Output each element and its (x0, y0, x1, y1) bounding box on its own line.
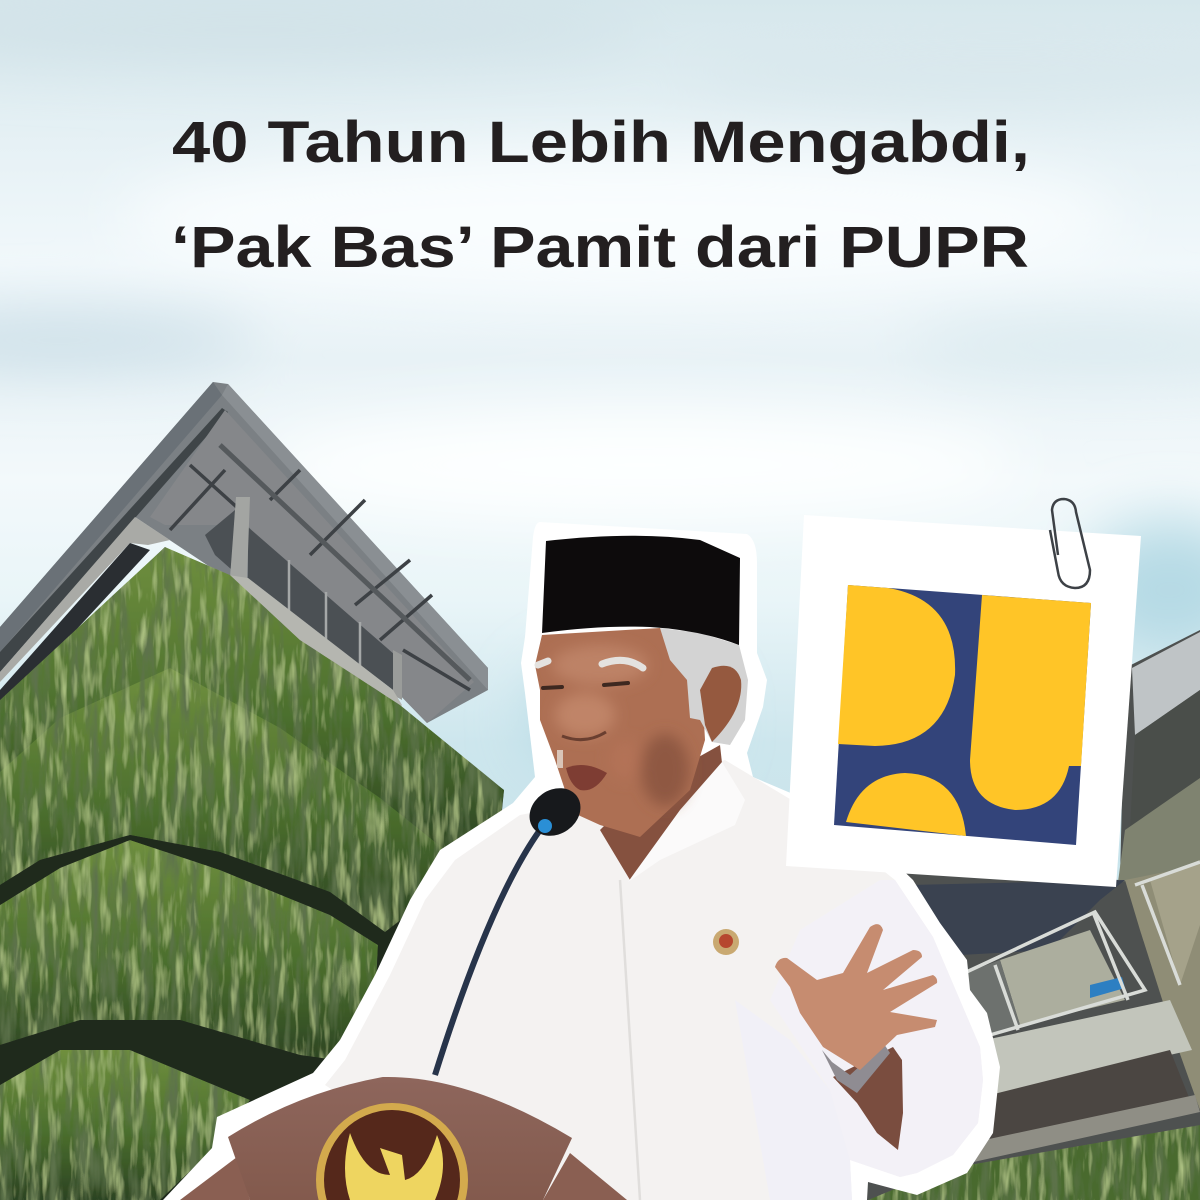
hand (775, 924, 937, 1070)
sticker card with PU logo (786, 499, 1141, 887)
ear (700, 666, 741, 742)
lapel pin (713, 929, 739, 955)
hair (660, 628, 748, 745)
green tier 3 (0, 840, 378, 1065)
sleeve (770, 880, 983, 1177)
title line 2: ‘Pak Bas’ Pamit dari PUPR (171, 215, 1029, 280)
green tier 4 (0, 1050, 250, 1200)
facade shadow base (0, 547, 504, 1200)
emblem (316, 1103, 468, 1200)
black cap (542, 536, 740, 645)
neck (600, 745, 725, 880)
green tier 2 (0, 668, 445, 932)
shirt (325, 760, 983, 1200)
title line 1: 40 Tahun Lebih Mengabdi, (172, 110, 1030, 175)
building right (860, 630, 1200, 1200)
face (535, 628, 705, 837)
person: white sticker outline (163, 522, 1000, 1200)
concrete panel behind railing (1000, 930, 1125, 1025)
podium (180, 1077, 627, 1200)
green tiers (0, 547, 504, 1200)
logo (834, 585, 1091, 845)
building left: roof and green facade (0, 382, 504, 1200)
microphone (435, 778, 590, 1075)
shrubs (868, 1125, 1200, 1200)
eyebrows, eyes, nose, mouth (538, 660, 643, 668)
roof canopy (0, 382, 488, 723)
green tier 1 (0, 547, 504, 860)
collar (628, 762, 745, 882)
icon: paperclip (1050, 499, 1090, 588)
forearm (833, 1047, 903, 1150)
title (171, 110, 1030, 280)
watch (822, 1044, 890, 1093)
white note (786, 515, 1141, 887)
